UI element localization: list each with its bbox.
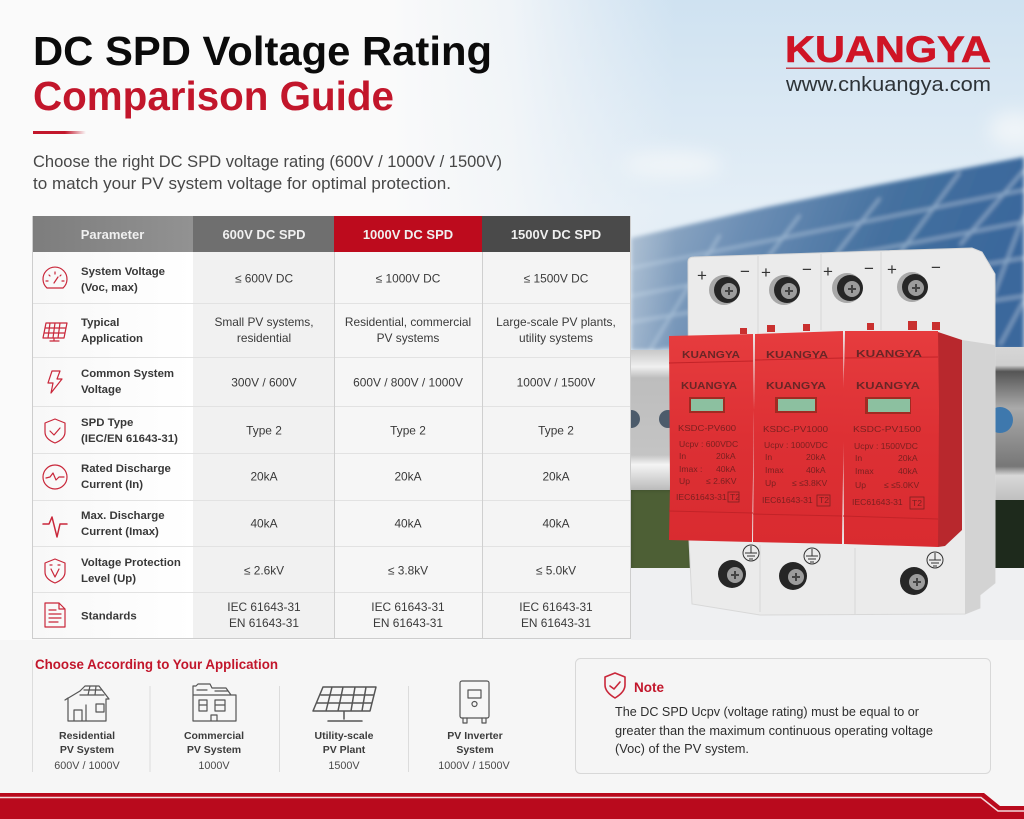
row: standards: EN 61643-31 — [373, 616, 443, 630]
row: SPD type: SPD Type — [81, 417, 133, 429]
polarity marks: + — [887, 260, 897, 279]
application: commercial: PV System — [187, 744, 241, 756]
row: common system voltage: 300V / 600V — [231, 376, 297, 390]
module 2: KSDC-PV1000 — [763, 424, 828, 434]
application: utility-scale plant: Utility-scale — [315, 730, 374, 742]
module 2: In — [765, 452, 772, 462]
row: max discharge current: 40kA — [542, 516, 570, 530]
table header row: 1000V DC SPD — [363, 227, 453, 242]
row: common system voltage: Common System — [81, 368, 174, 380]
row: SPD type: (IEC/EN 61643-31) — [81, 433, 178, 445]
module 2 — [753, 331, 844, 544]
row: max discharge current — [43, 510, 570, 538]
row: max discharge current: Max. Discharge — [81, 510, 165, 522]
polarity marks: − — [740, 262, 750, 281]
row: standards: IEC 61643-31 — [519, 600, 593, 614]
red tabs — [740, 321, 940, 334]
subtitle: to match your PV system voltage for optimal protection. — [33, 175, 451, 193]
application: commercial: Commercial — [184, 730, 244, 742]
row: common system voltage: Voltage — [81, 384, 121, 396]
row: common system voltage: 600V / 800V / 1000V — [353, 376, 463, 390]
module 2: Imax — [765, 465, 784, 475]
module 2: Up — [765, 478, 776, 488]
module 2: ≤ ≤3.8KV — [792, 478, 827, 488]
red side face — [938, 332, 962, 547]
subtitle: Choose the right DC SPD voltage rating (600V / 1000V / 1500V) — [33, 153, 502, 171]
row: rated discharge current: 20kA — [250, 470, 278, 484]
module 1: 40kA — [716, 464, 736, 474]
module 3: 40kA — [898, 466, 918, 476]
row: system voltage — [43, 266, 589, 294]
footer band — [0, 793, 1024, 819]
application: residential: PV System — [60, 744, 114, 756]
row: system voltage: System Voltage — [81, 266, 165, 278]
polarity marks — [697, 258, 941, 285]
row: standards: Standards — [81, 610, 137, 622]
row: voltage protection level: ≤ 3.8kV — [388, 564, 428, 578]
module 1: KSDC-PV600 — [678, 423, 736, 433]
white device body — [688, 248, 995, 615]
module 2: KUANGYA — [766, 381, 826, 392]
module 3: IEC61643-31 — [852, 497, 903, 507]
row: standards: EN 61643-31 — [521, 616, 591, 630]
row: typical application — [43, 315, 616, 345]
row: SPD type — [45, 417, 574, 445]
module 3: KUANGYA — [856, 381, 920, 392]
application: commercial: 1000V — [198, 760, 230, 772]
module 1: In — [679, 451, 686, 461]
polarity marks: − — [802, 260, 812, 279]
module 3: Imax — [855, 466, 874, 476]
row: typical application: Application — [81, 333, 143, 345]
application: utility-scale plant: PV Plant — [323, 744, 366, 756]
module 3: Up — [855, 480, 866, 490]
module 3: KUANGYA — [856, 349, 922, 360]
SPD device — [669, 248, 995, 615]
module 2: 40kA — [806, 465, 826, 475]
icon: shield check — [605, 673, 625, 698]
module 1: T2 — [730, 492, 740, 502]
row: SPD type: Type 2 — [246, 424, 282, 438]
row: typical application: utility systems — [519, 331, 593, 345]
application: PV inverter — [438, 681, 511, 772]
row: max discharge current: 40kA — [250, 516, 278, 530]
module 1: KUANGYA — [681, 381, 737, 392]
row: max discharge current: 40kA — [394, 516, 422, 530]
row: typical application: residential — [237, 331, 291, 345]
background photo: sky, solar panel and rail — [522, 0, 1024, 568]
module 2: Ucpv : 1000VDC — [764, 440, 828, 450]
title: DC SPD Voltage Rating — [33, 28, 492, 74]
application: PV inverter: PV Inverter — [447, 730, 503, 742]
row: rated discharge current — [43, 463, 570, 491]
polarity marks: + — [823, 262, 833, 281]
row: SPD type: Type 2 — [390, 424, 426, 438]
table header row — [81, 227, 601, 242]
note text: greater than the maximum continuous operating voltage — [615, 724, 933, 738]
ground symbols — [743, 545, 943, 568]
terminal screws — [709, 272, 928, 595]
row: system voltage: ≤ 1000V DC — [376, 272, 441, 286]
row: typical application: PV systems — [377, 331, 439, 345]
row: rated discharge current: 20kA — [542, 470, 570, 484]
title — [33, 28, 492, 119]
device right side shading — [962, 340, 995, 614]
application: PV inverter: 1000V / 1500V — [438, 760, 511, 772]
row: rated discharge current: Rated Discharge — [81, 463, 171, 475]
module 1: ≤ 2.6KV — [706, 476, 737, 486]
application: commercial — [184, 684, 244, 772]
polarity marks: + — [761, 263, 771, 282]
note heading: Note — [634, 680, 664, 695]
application: utility-scale plant: 1500V — [328, 760, 360, 772]
module 1: KUANGYA — [682, 350, 740, 361]
note text — [615, 705, 933, 756]
application: residential — [54, 686, 121, 772]
section heading: choose according to your application: Choose According to Your Application — [35, 656, 278, 672]
terminal lines — [758, 252, 881, 614]
row: SPD type: Type 2 — [538, 424, 574, 438]
module 3: T2 — [912, 498, 922, 508]
table header row: 600V DC SPD — [222, 227, 306, 242]
row: voltage protection level: ≤ 2.6kV — [244, 564, 284, 578]
module 3: In — [855, 453, 862, 463]
website url: www.cnkuangya.com — [785, 74, 991, 96]
application dividers — [32, 660, 408, 772]
module 2: 20kA — [806, 452, 826, 462]
polarity marks: − — [864, 259, 874, 278]
table header row: 1500V DC SPD — [511, 227, 601, 242]
row: common system voltage — [48, 368, 595, 396]
row: system voltage: ≤ 600V DC — [235, 272, 293, 286]
row: common system voltage: 1000V / 1500V — [517, 376, 595, 390]
row: typical application: Typical — [81, 317, 119, 329]
module 3: KSDC-PV1500 — [853, 424, 921, 434]
note text: (Voc) of the PV system. — [615, 742, 749, 756]
comparison table — [32, 216, 631, 638]
row: rated discharge current: Current (In) — [81, 479, 143, 491]
row: standards: IEC 61643-31 — [371, 600, 445, 614]
row: voltage protection level: Level (Up) — [81, 573, 136, 585]
module 1: IEC61643-31 — [676, 492, 727, 502]
application: PV inverter: System — [456, 744, 494, 756]
module 3 — [843, 331, 939, 547]
module 2: IEC61643-31 — [762, 495, 813, 505]
module 2: T2 — [819, 495, 829, 505]
module 3: Ucpv : 1500VDC — [854, 441, 918, 451]
module 3: 20kA — [898, 453, 918, 463]
row: standards: EN 61643-31 — [229, 616, 299, 630]
module 2: KUANGYA — [766, 350, 828, 361]
row: typical application: Large-scale PV plants, — [496, 315, 616, 329]
note text: The DC SPD Ucpv (voltage rating) must be equal to or — [615, 705, 919, 719]
row: system voltage: ≤ 1500V DC — [524, 272, 589, 286]
row: voltage protection level: ≤ 5.0kV — [536, 564, 576, 578]
row: rated discharge current: 20kA — [394, 470, 422, 484]
subtitle — [33, 153, 502, 193]
module 1: Up — [679, 476, 690, 486]
module 1: Ucpv : 600VDC — [679, 439, 738, 449]
module 1: Imax : — [679, 464, 702, 474]
title: Comparison Guide — [33, 73, 394, 119]
application: residential: Residential — [59, 730, 115, 742]
row: system voltage: (Voc, max) — [81, 282, 138, 294]
module 1 — [669, 334, 754, 542]
brand logo: KUANGYA — [785, 29, 991, 70]
title underline — [33, 131, 86, 134]
application: utility-scale plant — [313, 687, 376, 772]
row: typical application: Small PV systems, — [214, 315, 314, 329]
row: voltage protection level — [45, 557, 576, 585]
module 3: ≤ ≤5.0KV — [884, 480, 919, 490]
module 1: 20kA — [716, 451, 736, 461]
row: typical application: Residential, commercial — [345, 315, 471, 329]
application: residential: 600V / 1000V — [54, 760, 121, 772]
row: standards: IEC 61643-31 — [227, 600, 301, 614]
table header row: Parameter — [81, 227, 144, 242]
row: standards — [45, 600, 593, 630]
polarity marks: − — [931, 258, 941, 277]
polarity marks: + — [697, 266, 707, 285]
row: voltage protection level: Voltage Protection — [81, 557, 181, 569]
row: max discharge current: Current (Imax) — [81, 526, 159, 538]
note panel — [576, 658, 990, 774]
